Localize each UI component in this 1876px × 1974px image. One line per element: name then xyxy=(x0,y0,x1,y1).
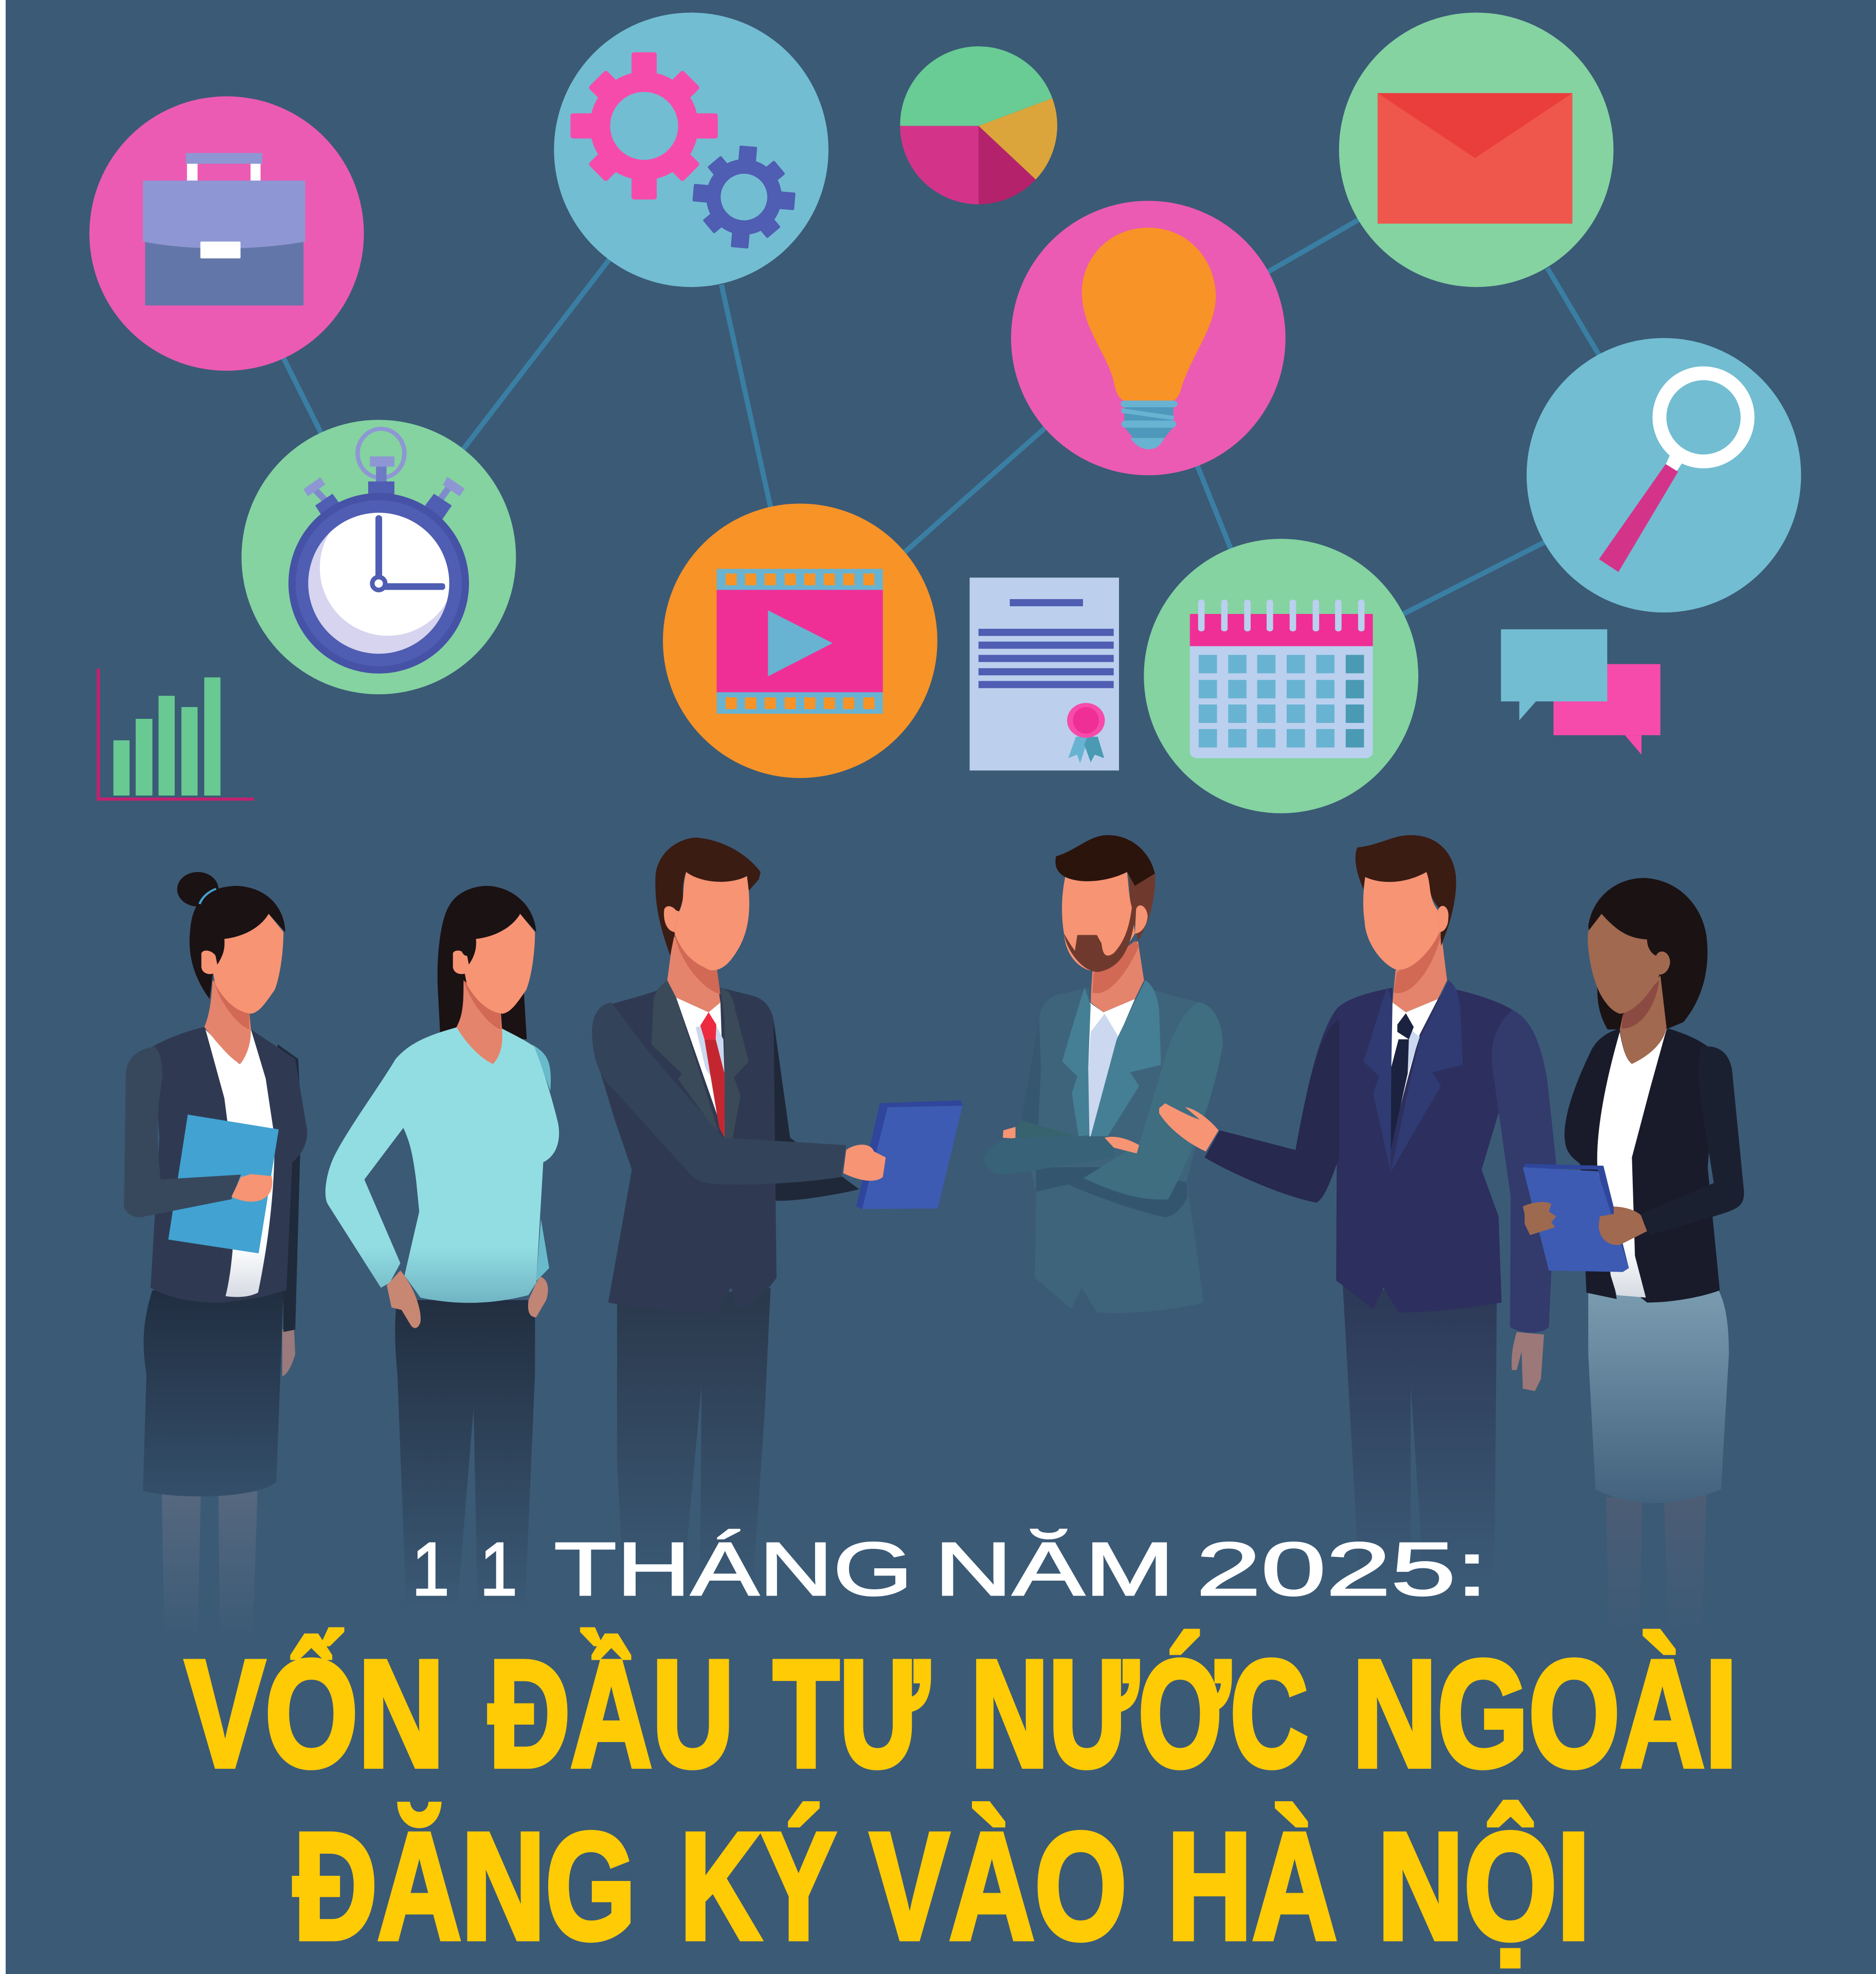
figure: woman in turquoise sweater xyxy=(326,886,559,1640)
figure: man in navy suit gesturing xyxy=(1159,835,1556,1610)
subtitle: 11 tháng năm 2025 xyxy=(412,1527,1488,1611)
icon: magnifying glass xyxy=(1527,338,1801,612)
figure: bearded man in teal suit xyxy=(984,835,1223,1313)
title line 1: vốn đầu tư nước ngoài: ĐẦU xyxy=(489,1628,734,1799)
icon: briefcase xyxy=(89,96,364,371)
subtitle: 11 tháng năm 2025: 1 xyxy=(412,1527,449,1611)
icon: bar chart xyxy=(98,668,254,799)
title line 2: đăng ký vào hà nội: KÝ xyxy=(680,1801,836,1971)
white left edge strip xyxy=(0,0,6,1974)
icon: stopwatch xyxy=(242,420,516,694)
figure: woman with bun and blue folder xyxy=(124,872,307,1640)
icon: envelope xyxy=(1339,12,1614,287)
title line 1: vốn đầu tư nước ngoài: NGOÀI xyxy=(1352,1628,1738,1799)
icon: certificate document xyxy=(970,577,1119,770)
title line 2: đăng ký vào hà nội: ĐĂNG xyxy=(293,1801,636,1971)
title line 2: đăng ký vào hà nội: NỘI xyxy=(1377,1801,1590,1971)
title line 1: vốn đầu tư nước ngoài: TƯ xyxy=(773,1628,931,1799)
figure: dark-skinned woman with blue tablet xyxy=(1523,878,1744,1640)
title line 2: đăng ký vào hà nội: VÀO xyxy=(870,1801,1127,1971)
title line 1: vốn đầu tư nước ngoài xyxy=(185,1628,1738,1799)
icon: pie chart xyxy=(900,46,1057,204)
figure: man in dark suit with red tie xyxy=(592,838,963,1629)
title line 1: vốn đầu tư nước ngoài: NƯỚC xyxy=(971,1628,1308,1799)
subtitle: 11 tháng năm 2025: NĂM xyxy=(934,1527,1175,1611)
icon: gears xyxy=(554,12,828,287)
subtitle: 11 tháng năm 2025: THÁNG xyxy=(554,1527,913,1611)
subtitle: 11 tháng năm 2025: 1 xyxy=(480,1527,517,1611)
subtitle: 11 tháng năm 2025: 2025: xyxy=(1196,1527,1488,1611)
title line 1: vốn đầu tư nước ngoài: VỐN xyxy=(185,1628,444,1799)
icon: calendar xyxy=(1144,539,1418,813)
title line 2: đăng ký vào hà nội: HÀ xyxy=(1167,1801,1337,1971)
icon: video player xyxy=(663,503,937,778)
icon: light bulb xyxy=(1011,201,1286,475)
icon: chat bubbles xyxy=(1501,629,1661,755)
title line 2: đăng ký vào hà nội xyxy=(293,1801,1590,1971)
network connector lines xyxy=(283,219,1599,614)
